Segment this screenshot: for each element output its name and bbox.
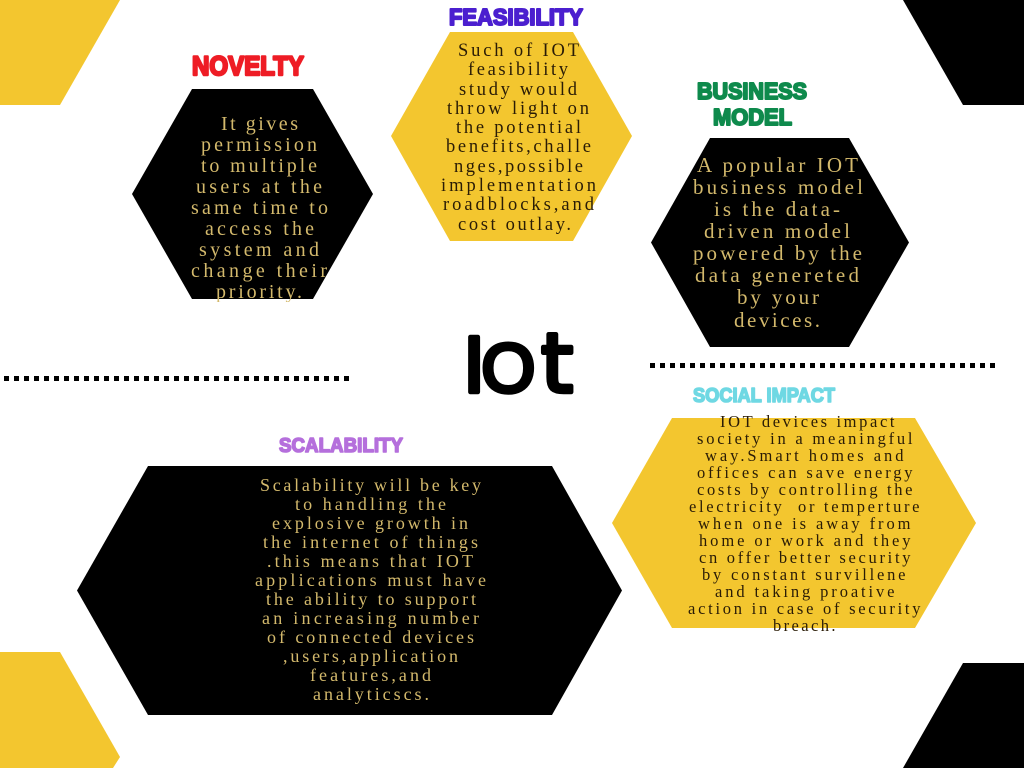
panel: feasibility bbox=[391, 4, 632, 241]
text: social impact description: action in case of security bbox=[688, 599, 921, 618]
text: social impact description: electricity or temperture bbox=[689, 497, 920, 516]
text: business model description bbox=[693, 153, 863, 332]
corner: bottom-right black shape bbox=[903, 663, 1024, 768]
divider: right dotted line bbox=[650, 363, 996, 368]
text: scalability description: of connected devices bbox=[267, 627, 474, 647]
text: novelty description: users at the bbox=[196, 176, 322, 198]
corner: top-left yellow shape bbox=[0, 0, 120, 105]
text: feasibility description: roadblocks,and bbox=[443, 195, 595, 215]
hexagon: novelty bbox=[132, 89, 373, 299]
text: novelty description bbox=[191, 113, 328, 303]
hexagon: feasibility bbox=[391, 32, 632, 241]
text: social impact description: when one is away from bbox=[698, 514, 911, 533]
text: business model description: powered by the bbox=[693, 241, 862, 265]
text: business model description: A popular IOT bbox=[697, 153, 858, 177]
text: scalability description: applications must have bbox=[255, 570, 486, 590]
text: scalability description: ,users,application bbox=[283, 646, 458, 666]
panel: scalability bbox=[77, 435, 622, 715]
title: IOT: O bbox=[482, 330, 535, 407]
text: social impact description: home or work and they bbox=[699, 531, 911, 550]
text: novelty description: system and bbox=[199, 239, 319, 261]
text: novelty description: priority. bbox=[216, 281, 302, 303]
heading: novelty: NOVELTY bbox=[192, 51, 304, 81]
corner: bottom-left yellow shape bbox=[0, 652, 120, 768]
text: social impact description: by constant survillene bbox=[702, 565, 906, 584]
text: feasibility description: implementation bbox=[441, 176, 596, 196]
text: social impact description bbox=[688, 412, 921, 635]
text: scalability description: analyticscs. bbox=[313, 684, 429, 704]
text: feasibility description: cost outlay. bbox=[458, 215, 571, 235]
text: business model description: is the data- bbox=[714, 197, 840, 221]
text: feasibility description: study would bbox=[459, 80, 578, 100]
hexagon: scalability bbox=[77, 466, 622, 715]
heading: feasibility: FEASIBILITY bbox=[449, 4, 583, 30]
text: business model description: by your bbox=[737, 285, 819, 309]
text: social impact description: costs by controlling the bbox=[697, 480, 912, 499]
text: scalability description: .this means that IOT bbox=[267, 551, 473, 571]
text: scalability description: Scalability will be key bbox=[260, 475, 481, 495]
text: social impact description: way.Smart homes and bbox=[705, 446, 904, 465]
text: feasibility description: feasibility bbox=[468, 60, 569, 80]
text: social impact description: breach. bbox=[773, 616, 836, 635]
text: business model description: data genereted bbox=[695, 263, 860, 287]
text: social impact description: and taking proative bbox=[715, 582, 894, 601]
text: feasibility description: Such of IOT bbox=[458, 41, 579, 61]
heading: business model bbox=[697, 78, 807, 130]
text: business model description: business model bbox=[693, 175, 863, 199]
text: scalability description bbox=[255, 475, 486, 704]
text: scalability description: the ability to support bbox=[266, 589, 476, 609]
text: feasibility description: benefits,challe bbox=[446, 137, 591, 157]
panel: social impact bbox=[612, 385, 976, 635]
text: feasibility description: nges,possible bbox=[454, 157, 583, 177]
text: scalability description: features,and bbox=[310, 665, 431, 685]
text: feasibility description: the potential bbox=[456, 118, 581, 138]
text: novelty description: same time to bbox=[191, 197, 328, 219]
text: novelty description: permission bbox=[201, 134, 317, 156]
text: novelty description: It gives bbox=[221, 113, 298, 135]
title: IOT: I bbox=[463, 320, 485, 409]
hexagon: social impact bbox=[612, 418, 976, 628]
text: feasibility description: throw light on bbox=[447, 99, 589, 119]
divider: left dotted line bbox=[4, 376, 350, 381]
heading: business model: MODEL bbox=[713, 104, 792, 130]
text: social impact description: offices can save energy bbox=[697, 463, 913, 482]
heading: scalability: SCALABILITY bbox=[279, 435, 404, 457]
text: scalability description: an increasing number bbox=[262, 608, 479, 628]
heading: social impact: SOCIAL IMPACT bbox=[693, 385, 835, 407]
text: scalability description: explosive growth in bbox=[272, 513, 468, 533]
text: business model description: driven model bbox=[704, 219, 850, 243]
text: social impact description: cn offer better security bbox=[699, 548, 911, 567]
corner: top-right black shape bbox=[903, 0, 1024, 105]
text: social impact description: IOT devices impact bbox=[720, 412, 895, 431]
text: novelty description: access the bbox=[205, 218, 314, 240]
hexagon: business model bbox=[651, 138, 909, 347]
panel: business model bbox=[651, 78, 909, 347]
text: scalability description: the internet of things bbox=[263, 532, 478, 552]
text: business model description: devices. bbox=[734, 308, 820, 332]
text: feasibility description bbox=[441, 41, 596, 235]
heading: business model: BUSINESS bbox=[697, 78, 807, 104]
text: social impact description: society in a meaningful bbox=[697, 429, 913, 448]
title: IOT: t bbox=[541, 317, 573, 412]
panel: novelty bbox=[132, 51, 373, 303]
text: novelty description: change their bbox=[191, 260, 327, 282]
text: novelty description: to multiple bbox=[201, 155, 317, 177]
text: scalability description: to handling the bbox=[295, 494, 446, 514]
